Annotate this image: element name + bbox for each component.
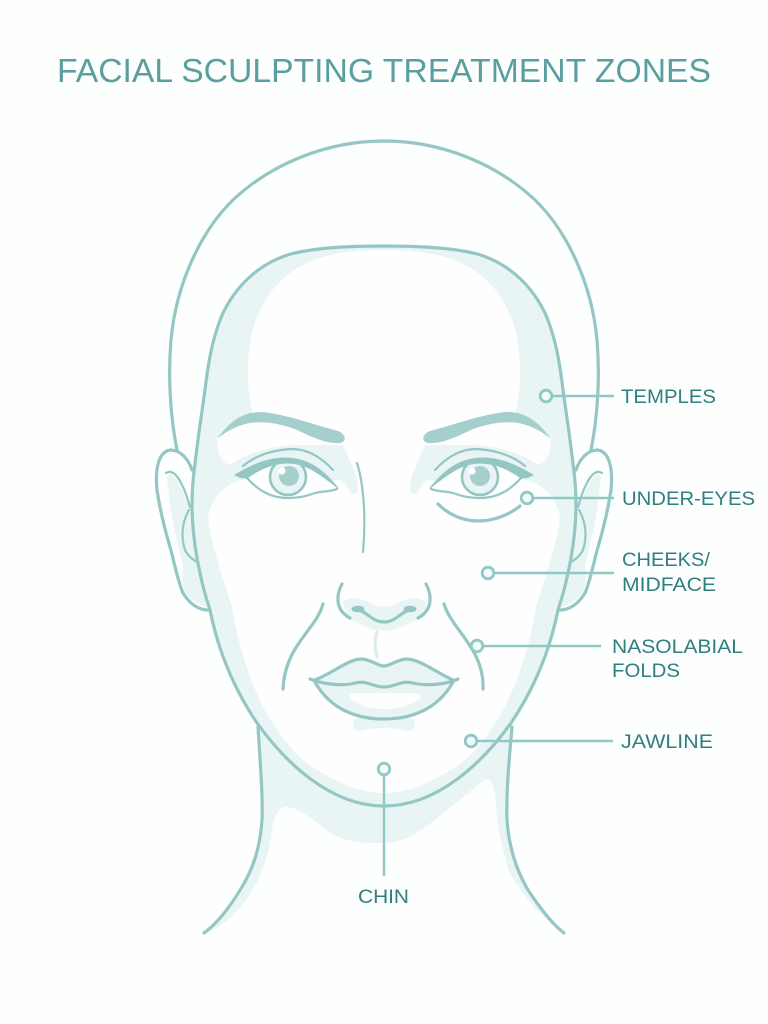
ear: right xyxy=(560,450,612,610)
face outline xyxy=(192,246,576,806)
callout: cheeks/midface: CHEEKS/ xyxy=(622,550,711,571)
head outline xyxy=(170,141,598,450)
callout: temples xyxy=(540,387,716,408)
face shape xyxy=(192,246,576,806)
callout: temples: TEMPLES xyxy=(621,387,716,408)
eye left xyxy=(235,449,338,498)
callout: cheeks/midface: MIDFACE xyxy=(622,575,716,596)
callout: jawline xyxy=(465,732,713,753)
eyebrow left xyxy=(217,412,345,443)
callout: nasolabial folds: FOLDS xyxy=(612,661,680,682)
callout: nasolabial folds xyxy=(471,637,743,682)
face illustration xyxy=(156,141,612,933)
nasolabial fold right xyxy=(444,604,483,689)
light area of face xyxy=(208,250,560,793)
callout: chin: CHIN xyxy=(358,887,409,908)
ear: left xyxy=(156,450,208,610)
callout: jawline: JAWLINE xyxy=(621,732,713,753)
callout: under-eyes: UNDER-EYES xyxy=(622,489,755,510)
callout: nasolabial folds: NASOLABIAL xyxy=(612,637,743,658)
eye shade left xyxy=(198,438,358,517)
callout: cheeks/midface xyxy=(482,550,716,596)
title: FACIAL SCULPTING TREATMENT ZONES xyxy=(57,52,711,89)
callout: chin xyxy=(358,763,409,908)
callout: under-eyes xyxy=(521,489,755,510)
neck xyxy=(204,727,564,933)
eye shade right xyxy=(410,438,570,517)
nose xyxy=(338,463,430,657)
eye right xyxy=(430,449,533,521)
lips xyxy=(310,659,458,731)
nasolabial fold left xyxy=(283,604,323,689)
eyebrow right xyxy=(423,412,551,443)
